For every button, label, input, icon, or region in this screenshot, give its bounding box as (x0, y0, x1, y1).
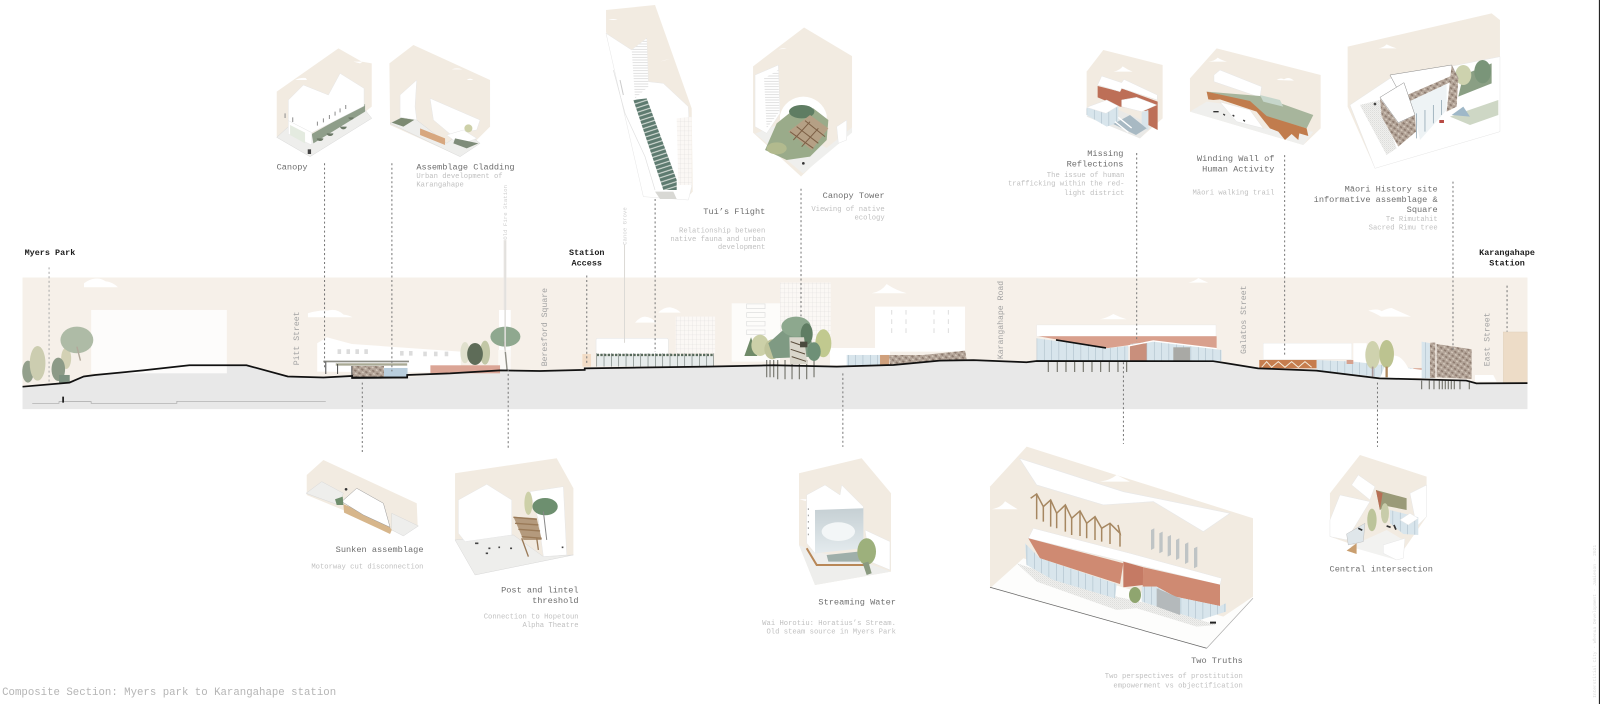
inset: Canopy Tower (753, 28, 852, 177)
text: Maori History site: Te Rimutahit (1386, 216, 1438, 224)
text: Canopy Tower: Viewing of native (811, 206, 885, 214)
text: Post and lintel threshold: Alpha Theatre (523, 622, 579, 630)
text: Tui's Flight: native fauna and urban (670, 236, 765, 244)
text: Streaming Water (762, 598, 896, 637)
canopy tower tree cluster (744, 317, 831, 364)
text: Two Truths (1105, 656, 1243, 691)
ground band (23, 360, 1527, 409)
text: Maori History site: Māori History site (1345, 184, 1438, 194)
text: Two Truths: Two perspectives of prostitution (1105, 673, 1243, 681)
grid building (676, 317, 715, 353)
label: Karangahape Station: Karangahape (1479, 248, 1535, 258)
text: Two Truths: Two Truths (1191, 656, 1243, 666)
text: Sunken assemblage (311, 545, 424, 571)
heading: Central intersection: Central intersection (1330, 564, 1433, 574)
brick building (430, 365, 500, 373)
station pavilion (582, 338, 713, 367)
text: Missing Reflections: Missing (1087, 149, 1123, 159)
inset: Streaming Water (799, 458, 891, 585)
street and place labels (25, 185, 1535, 366)
text: Missing Reflections: trafficking within the red- (1008, 181, 1124, 189)
terracotta hall (1037, 325, 1222, 372)
text: Winding Wall of Human Activity: Winding Wall of (1197, 154, 1274, 164)
side credit: Interstitial City - Whenua Development - Jamieson - 2021 (1592, 545, 1598, 698)
text: Winding Wall of Human Activity: Human Activity (1202, 164, 1274, 174)
leader lines (49, 153, 1507, 453)
text: Sunken assemblage: Sunken assemblage (336, 545, 424, 555)
text: Assemblage Cladding: Assemblage Cladding (416, 162, 515, 172)
label: Pitt Street: Pitt Street (292, 311, 302, 365)
text: Two Truths: empowerment vs objectification (1113, 683, 1243, 691)
text: Post and lintel threshold: Post and lintel (501, 585, 579, 595)
inset: Winding Wall of Human Activity (1190, 48, 1321, 145)
caption: Composite Section: Myers park to Karangahape station (2, 687, 336, 699)
label: Karangahape Station: Station (1489, 258, 1525, 268)
inset: Two Truths (990, 447, 1253, 648)
label: Station Access: Station (569, 248, 605, 258)
inset: Central intersection (1330, 455, 1427, 560)
text: Missing Reflections: light district (1064, 190, 1124, 198)
text: Maori History site: Sacred Rimu tree (1369, 225, 1438, 233)
text: Winding Wall of Human Activity: Māori walking trail (1192, 189, 1274, 197)
low shopfronts (830, 348, 967, 366)
label: Canoe Grove: Canoe Grove (622, 207, 629, 245)
hall (1028, 528, 1222, 585)
Myers Park trees (22, 327, 93, 383)
text: Streaming Water: Streaming Water (818, 598, 896, 608)
text: Post and lintel threshold: threshold (532, 596, 579, 606)
sunken canopy assemblage (323, 361, 409, 378)
white block building (91, 310, 227, 373)
inset: Canopy (277, 48, 372, 157)
section east: Karangahape Road to East Street (1037, 278, 1527, 389)
fins (1151, 528, 1197, 568)
inset: Post and lintel threshold (455, 458, 573, 575)
winding wall section (1259, 340, 1423, 378)
text: Missing Reflections: The issue of human (1047, 172, 1124, 180)
history site building (1422, 342, 1472, 389)
text: Maori History site (1314, 184, 1438, 233)
white office building (732, 303, 780, 362)
white heritage building (317, 337, 461, 373)
canopy tower piles (767, 360, 814, 379)
grid tower (780, 283, 831, 341)
page edge line (1599, 0, 1600, 704)
inset: Maori History site (1348, 13, 1500, 168)
text: Assemblage Cladding: Karangahape (416, 182, 464, 190)
text: Missing Reflections: Reflections (1067, 159, 1123, 169)
text: Post and lintel threshold (484, 585, 579, 630)
Beresford trees (460, 327, 520, 371)
text: Winding Wall of Human Activity (1192, 154, 1274, 197)
heading: Canopy: Canopy (277, 162, 308, 172)
large white building (875, 307, 965, 352)
text: Tui's Flight: Tui’s Flight (703, 207, 765, 217)
ground line (23, 360, 1527, 387)
text: Tui's Flight: Relationship between (679, 228, 765, 236)
text: Sunken assemblage: Motorway cut disconnection (311, 563, 424, 571)
text: Streaming Water: Old steam source in Myers Park (767, 629, 896, 637)
inset: Tui's Flight (606, 5, 693, 200)
inset: Missing Reflections (1087, 50, 1163, 138)
section west: Myers Park to Beresford Square (22, 240, 520, 403)
timber frames (1031, 494, 1120, 547)
label: Station Access: Access (572, 258, 602, 268)
text: Maori History site: informative assemblage & (1314, 195, 1438, 205)
sky band (23, 278, 1527, 388)
text: Canopy Tower (811, 191, 885, 222)
label: East Street: East Street (1484, 312, 1493, 366)
text: Tui's Flight (670, 207, 765, 252)
text: Canopy Tower: ecology (854, 214, 885, 222)
scale bar (32, 397, 326, 403)
inset: Sunken assemblage (306, 460, 418, 536)
text: Canopy Tower: Canopy Tower (823, 191, 885, 201)
label: Myers Park: Myers Park (25, 248, 75, 258)
text: Missing Reflections (1008, 149, 1124, 198)
text: Tui's Flight: development (718, 244, 765, 252)
text: Maori History site: Square (1407, 205, 1438, 215)
text: Assemblage Cladding: Urban development of (416, 173, 503, 181)
text: Assemblage Cladding (416, 162, 515, 190)
section centre: station to Karangahape Road (582, 283, 967, 379)
label: Beresford Square: Beresford Square (540, 288, 550, 366)
text: Streaming Water: Wai Horotiu: Horatius’s Stream. (762, 620, 896, 628)
text: Post and lintel threshold: Connection to Hopetoun (484, 613, 579, 621)
east street corner building (1503, 332, 1527, 383)
label: Karangahape Road: Karangahape Road (996, 281, 1006, 359)
label: Old Fire Station: Old Fire Station (502, 185, 509, 240)
label: Galatos Street: Galatos Street (1239, 285, 1249, 354)
inset: Assemblage Cladding (389, 45, 490, 157)
panel: composite street section (22, 240, 1527, 409)
